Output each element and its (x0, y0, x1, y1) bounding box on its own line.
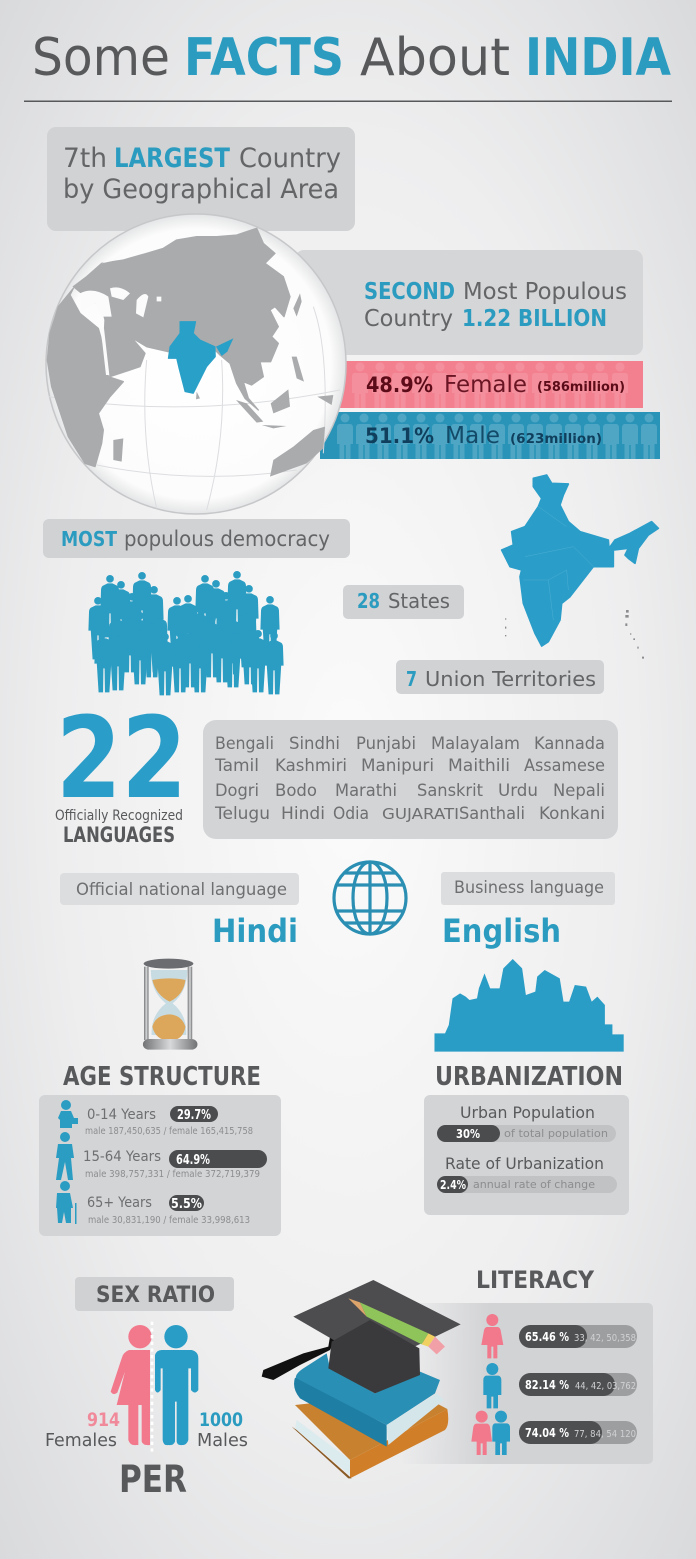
panel: language list: GUJARATI (382, 805, 459, 823)
official national language: Hindi (212, 912, 298, 950)
22 languages heading: 22 (56, 694, 187, 824)
panel: sex ratio: Males (197, 1430, 248, 1451)
panel: sex ratio: PER (119, 1458, 187, 1501)
female population bar (340, 361, 643, 408)
panel: literacy: 74.04 % (525, 1425, 569, 1440)
panel: language list: Sanskrit (417, 781, 483, 801)
panel: most populous democracy: populous democracy (124, 527, 330, 551)
panel: language list: Hindi (281, 804, 325, 824)
female population bar: Female (444, 372, 527, 398)
panel: language list: Punjabi (356, 734, 416, 754)
label: 7 union territories: 7 (406, 667, 417, 691)
panel: largest country: by Geographical Area (63, 174, 339, 205)
panel: language list: Maithili (448, 756, 510, 776)
panel: population: Most Populous (463, 279, 627, 305)
panel: sex ratio: Females (45, 1430, 117, 1451)
panel: literacy: 65.46 % (525, 1329, 569, 1344)
panel: age structure: 64.9% (176, 1153, 210, 1168)
panel: population: Country (364, 306, 453, 332)
panel: most populous democracy: MOST (61, 527, 117, 551)
icon: city skyline (434, 959, 624, 1052)
panel: urbanization: Urban Population (460, 1103, 595, 1122)
panel: language list (203, 720, 618, 839)
title: Some (32, 28, 170, 88)
panel: urbanization: annual rate of change (473, 1178, 595, 1191)
panel: literacy: 82.14 % (525, 1377, 569, 1392)
panel: urbanization: 2.4% (440, 1178, 466, 1192)
india states map (502, 475, 658, 659)
heading: urbanization: URBANIZATION (435, 1062, 623, 1092)
panel: largest country: Country (239, 143, 341, 174)
male population bar: (623million) (510, 432, 602, 447)
panel: language list: Santhali (459, 804, 525, 824)
panel: largest country: 7th (63, 143, 107, 174)
crowd of people (88, 571, 284, 695)
panel: age structure: 29.7% (177, 1108, 211, 1123)
icon: wireframe globe (334, 862, 406, 934)
panel: age structure: male 30,831,190 / female 33,998,613 (88, 1215, 250, 1226)
panel: age structure (39, 1095, 281, 1236)
heading: age structure: AGE STRUCTURE (63, 1062, 261, 1092)
official national language: Official national language (76, 880, 287, 900)
female population bar: 48.9% (366, 373, 433, 397)
panel: language list: Tamil (214, 756, 259, 776)
panel: literacy: 77, 84, 54 120 (574, 1429, 636, 1440)
panel: language list: Odia (333, 804, 369, 824)
female population bar: (586million) (537, 380, 625, 395)
panel: age structure: 65+ Years (87, 1195, 152, 1211)
panel: language list: Malayalam (431, 734, 520, 754)
panel: largest country (47, 127, 355, 231)
panel: language list: Marathi (335, 781, 397, 801)
22 languages heading: Officially Recognized (55, 808, 183, 824)
male population bar: Male (445, 423, 500, 449)
panel: language list: Assamese (524, 756, 605, 776)
panel: language list: Dogri (215, 781, 259, 801)
panel: language list: Kannada (534, 734, 605, 754)
panel: age structure: male 398,757,331 / female 372,719,379 (85, 1169, 260, 1180)
panel: age structure: 5.5% (171, 1197, 202, 1212)
panel: urbanization: 30% (456, 1126, 480, 1141)
panel: population: 1.22 BILLION (462, 306, 607, 332)
icon: hourglass (143, 959, 197, 1050)
label: 7 union territories: Union Territories (425, 667, 596, 691)
title (32, 28, 671, 88)
title: FACTS (184, 28, 344, 88)
business language: English (442, 912, 561, 950)
title: INDIA (525, 28, 671, 88)
panel: most populous democracy (43, 519, 350, 558)
panel: population (295, 250, 643, 355)
title: About (360, 28, 510, 88)
male population bar (320, 412, 660, 459)
panel: sex ratio: 914 (87, 1409, 120, 1431)
panel: urbanization (424, 1095, 629, 1215)
official national language (60, 873, 299, 950)
panel: literacy: 33, 42, 50,358 (574, 1333, 636, 1344)
panel: age structure: 15-64 Years (83, 1149, 161, 1165)
eurasia landmass (73, 228, 290, 410)
panel: population: SECOND (364, 279, 455, 305)
panel: language list: Urdu (498, 781, 538, 801)
panel: language list: Bodo (275, 781, 317, 801)
panel: sex ratio: SEX RATIO (96, 1283, 215, 1308)
africa (47, 288, 123, 467)
label: 28 states: States (388, 589, 450, 613)
panel: literacy: 44, 42, 03,762 (575, 1381, 636, 1392)
panel: largest country: LARGEST (114, 143, 230, 174)
business language: Business language (454, 878, 604, 898)
panel: language list: Kashmiri (275, 756, 347, 776)
panel: sex ratio (45, 1277, 248, 1501)
panel: language list: Konkani (539, 804, 605, 824)
panel: age structure: male 187,450,635 / female 165,415,758 (85, 1126, 253, 1137)
icon: books with graduation cap and pencil (262, 1280, 461, 1478)
panel: language list: Telugu (214, 804, 270, 824)
panel: urbanization: Rate of Urbanization (445, 1154, 604, 1173)
panel: language list: Nepali (553, 781, 605, 801)
panel: sex ratio: 1000 (199, 1409, 243, 1431)
label: 7 union territories (396, 660, 604, 694)
heading: literacy: LITERACY (476, 1266, 595, 1294)
label: 28 states (343, 585, 464, 619)
panel: language list: Bengali (215, 734, 274, 754)
panel: urbanization: of total population (504, 1127, 608, 1140)
panel: literacy (400, 1303, 653, 1464)
22 languages heading: LANGUAGES (63, 823, 175, 847)
panel: age structure: 0-14 Years (87, 1107, 156, 1123)
business language (441, 872, 615, 950)
globe with India highlighted (46, 214, 346, 514)
panel: language list: Sindhi (289, 734, 340, 754)
panel: language list: Manipuri (361, 756, 434, 776)
label: 28 states: 28 (357, 589, 380, 613)
male population bar: 51.1% (365, 424, 434, 448)
